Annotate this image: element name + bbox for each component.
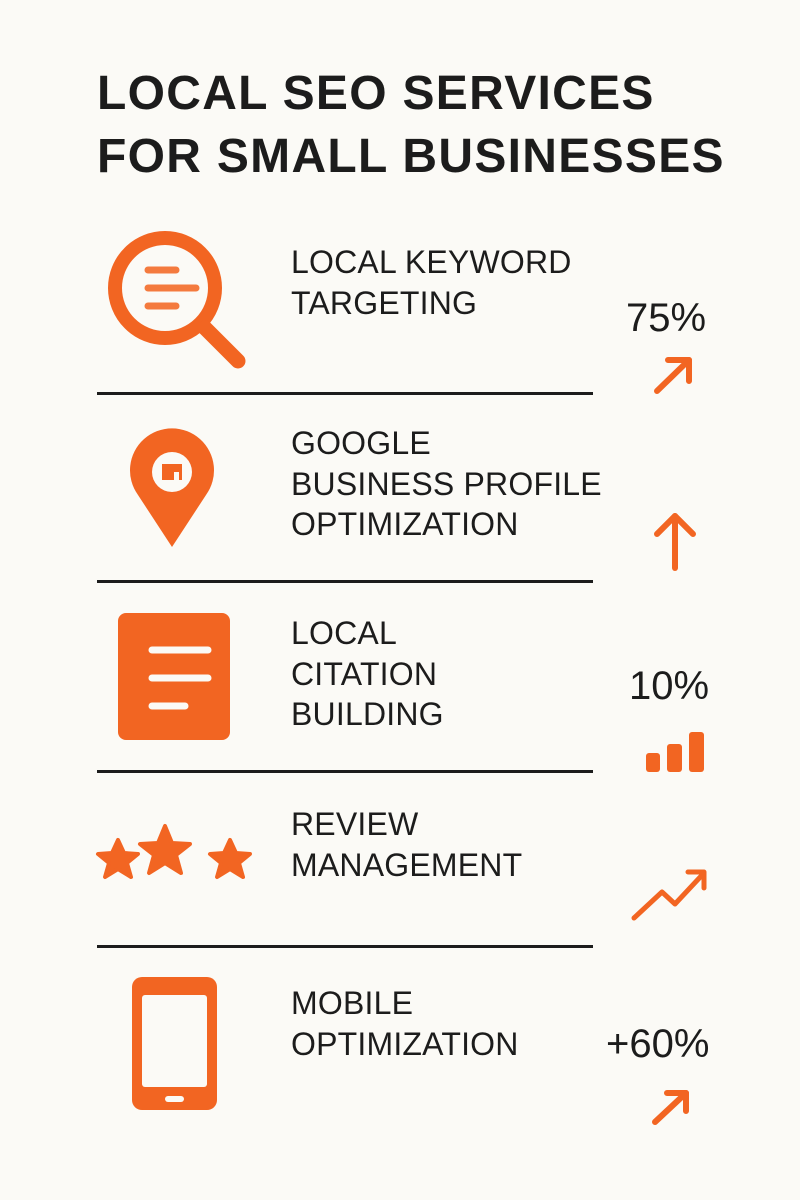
chart: bars <box>646 732 704 772</box>
icon: magnifier <box>115 238 238 361</box>
stat: 75%: 75% <box>626 296 706 340</box>
label: local citation building: CITATION <box>291 656 437 692</box>
arrow: diagonal up 1 <box>657 360 689 391</box>
label: mobile optimization <box>291 985 519 1062</box>
label: review management: REVIEW <box>291 806 418 842</box>
label: google business profile: BUSINESS PROFILE <box>291 466 602 502</box>
title: LOCAL SEO SERVICES <box>97 67 655 120</box>
arrow: trend zigzag <box>634 872 704 918</box>
label: local citation building: LOCAL <box>291 615 397 651</box>
icon: stars <box>98 826 250 877</box>
arrow: up <box>657 516 693 568</box>
label: local keyword targeting: LOCAL KEYWORD <box>291 244 572 280</box>
label: local citation building <box>291 615 444 732</box>
label: local citation building: BUILDING <box>291 696 444 732</box>
icon: document <box>118 613 230 740</box>
label: local keyword targeting <box>291 244 572 320</box>
title: FOR SMALL BUSINESSES <box>97 130 725 183</box>
label: local keyword targeting: TARGETING <box>291 284 477 320</box>
icon: map pin <box>130 428 214 547</box>
stat: +60%: +60% <box>606 1022 709 1066</box>
label: google business profile <box>291 425 602 542</box>
label: mobile optimization: MOBILE <box>291 985 413 1021</box>
icon: phone <box>132 977 217 1110</box>
label: google business profile: OPTIMIZATION <box>291 506 519 542</box>
label: review management <box>291 806 522 882</box>
arrow: diagonal up 2 <box>655 1093 686 1122</box>
label: review management: MANAGEMENT <box>291 846 522 882</box>
label: mobile optimization: OPTIMIZATION <box>291 1026 519 1062</box>
stat: 10%: 10% <box>629 664 709 708</box>
label: google business profile: GOOGLE <box>291 425 431 461</box>
title <box>97 67 725 183</box>
